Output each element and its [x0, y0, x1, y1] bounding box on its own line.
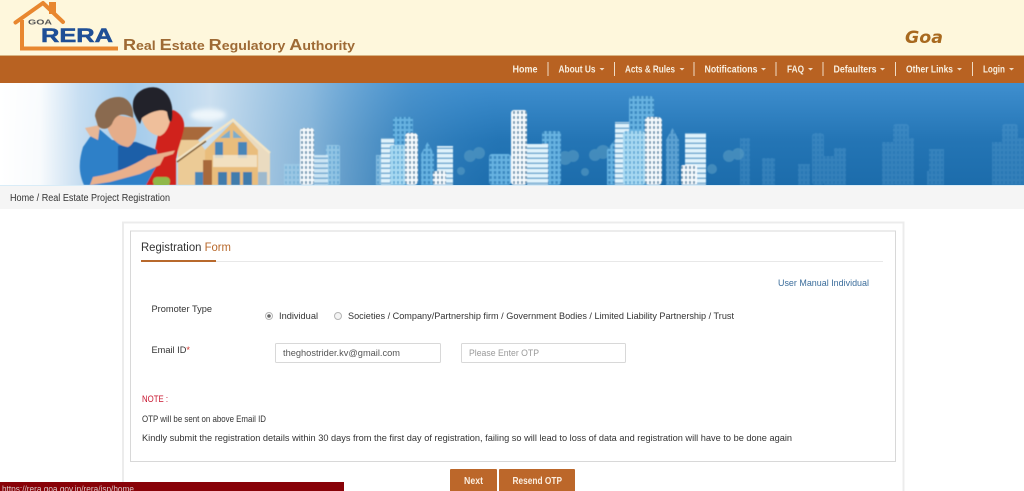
link: user manual: User Manual Individual	[778, 278, 869, 289]
promoter type row: Promoter Type	[152, 304, 212, 315]
promoter type row: Societies / Company/Partnership firm / Government Bodies / Limited Liability Partnership / Trust	[348, 311, 734, 322]
navigation bar: Acts & Rules	[625, 64, 675, 76]
skyline: building cluster one	[284, 117, 453, 185]
note: Kindly submit the registration details within 30 days from the first day of registration, failing so will lead to loss of data and registration will have to be done again	[142, 433, 792, 444]
promoter type row: Individual	[279, 311, 318, 322]
email row: theghostrider.kv@gmail.com	[283, 348, 400, 359]
button: next: Next	[464, 476, 484, 487]
navigation bar: Defaulters	[834, 64, 877, 76]
skyline: trees	[457, 145, 744, 176]
navigation bar: Login	[983, 64, 1005, 76]
woman	[133, 87, 184, 186]
banner	[0, 83, 1024, 186]
navigation bar: About Us	[558, 64, 596, 76]
logo: Goa RERA house: RERA	[41, 25, 113, 47]
breadcrumb bar	[0, 185, 1024, 209]
email row: Email ID*	[152, 345, 190, 356]
house	[177, 120, 270, 185]
logo: Goa RERA house	[16, 2, 118, 48]
panel: form body	[130, 231, 896, 462]
panel: registration card	[123, 222, 904, 491]
note: OTP will be sent on above Email ID	[142, 414, 266, 425]
state name: Goa	[905, 28, 943, 48]
clouds behind house	[190, 109, 226, 121]
promoter type row	[152, 304, 734, 322]
illustration: couple and house	[80, 87, 270, 186]
email row: Please Enter OTP	[469, 348, 539, 359]
navigation bar: Notifications	[704, 64, 758, 76]
email row	[152, 344, 626, 362]
header band	[0, 0, 1024, 56]
heading: Registration Form	[141, 242, 231, 254]
breadcrumb bar: Home / Real Estate Project Registration	[10, 193, 170, 204]
navigation bar: FAQ	[787, 64, 804, 76]
note	[142, 394, 792, 444]
skyline: faded right buildings	[740, 124, 1024, 185]
skyline: building cluster three	[607, 96, 706, 185]
note: NOTE :	[142, 394, 168, 405]
skyline: building cluster two	[489, 110, 561, 185]
navigation bar: Other Links	[906, 64, 953, 76]
site name: Real Estate Regulatory Authority	[123, 37, 355, 54]
man	[80, 97, 175, 185]
navigation bar: Home	[512, 64, 538, 76]
navigation bar	[0, 55, 1024, 83]
button: resend otp	[499, 469, 575, 491]
button: resend otp: Resend OTP	[512, 476, 562, 487]
logo: Goa RERA house: GOA	[28, 18, 53, 26]
button: next	[450, 469, 497, 491]
browser status bar	[0, 482, 344, 491]
